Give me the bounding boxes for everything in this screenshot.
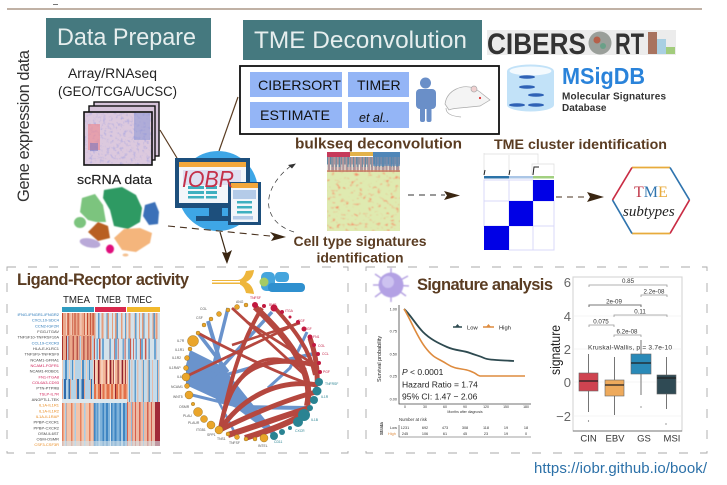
label: Gene expression data: Gene expression data bbox=[15, 49, 33, 202]
risk table: 473 bbox=[442, 426, 448, 430]
node labels: IGF bbox=[306, 327, 312, 331]
heatmap row labels: ANGPTL1-TEK bbox=[32, 397, 59, 402]
chart: signature boxplot: 0 bbox=[564, 375, 571, 390]
logo: MSigDB: Molecular Signatures bbox=[562, 92, 666, 102]
heading: Data Prepare bbox=[46, 18, 211, 58]
column headers: TMEC bbox=[126, 295, 152, 306]
connector: methods to IOBR bbox=[219, 97, 238, 151]
heading: Data Prepare: Data Prepare bbox=[57, 24, 196, 51]
node labels: PGF bbox=[323, 370, 330, 374]
chart: signature boxplot: 0.11 bbox=[634, 308, 646, 316]
risk table: 23 bbox=[484, 432, 488, 436]
chart: signature boxplot: 6 bbox=[564, 275, 571, 290]
heatmap row labels: NCAM1-FGFR1 bbox=[31, 363, 60, 368]
red ribbons bbox=[185, 307, 318, 438]
panel: deconvolution methods: CIBERSORT bbox=[258, 77, 341, 93]
chart: signature boxplot: CIN bbox=[580, 434, 597, 444]
node labels: BMP bbox=[269, 303, 277, 307]
column headers: TMEB bbox=[96, 295, 121, 306]
heatmap row labels: TNFSF10-TNFRSF10A bbox=[17, 335, 59, 340]
chart: TME cluster matrix bbox=[484, 153, 554, 250]
heatmap row labels bbox=[17, 312, 60, 447]
teal nodes bbox=[270, 378, 323, 440]
risk table: High bbox=[388, 432, 396, 436]
chart: signature boxplot: 0.075 bbox=[593, 318, 609, 326]
heatmap row labels: PPBP-CXCR2 bbox=[33, 425, 60, 430]
logo: MSigDB: MSigDB bbox=[562, 63, 645, 89]
heading: bulkseq deconvolution: bulkseq deconvolution bbox=[295, 136, 462, 152]
boxes bbox=[579, 354, 676, 396]
chart: signature boxplot: 2.2e-08 bbox=[644, 288, 665, 296]
link: book URL: https://iobr.github.io/book/ bbox=[534, 460, 708, 477]
icon: human bbox=[416, 78, 436, 122]
chart: signature boxplot: 2e-09 bbox=[606, 298, 622, 306]
logo: MSigDB bbox=[507, 63, 666, 114]
chart: Kaplan-Meier survival: 0 bbox=[404, 405, 406, 409]
chart: signature boxplot bbox=[547, 275, 682, 444]
risk table: 45 bbox=[463, 432, 467, 436]
statistics: Hazard Ratio = 1.74 bbox=[402, 380, 478, 390]
chart: Kaplan-Meier survival: 150 bbox=[503, 405, 509, 409]
risk table: 1231 bbox=[401, 426, 409, 430]
chart: signature boxplot: 4 bbox=[564, 309, 571, 324]
statistics: 95% CI: 1.47 − 2.06 bbox=[402, 392, 478, 402]
node labels: OSMR bbox=[179, 405, 190, 409]
legend: High bbox=[499, 326, 511, 332]
label: Cell type signatures identification: Cell type signatures bbox=[293, 233, 427, 249]
risk table: 61 bbox=[443, 432, 447, 436]
chart: signature boxplot: Kruskal-Wallis, p = 3.7e-10 bbox=[588, 344, 672, 352]
node labels: INTEL bbox=[258, 444, 268, 448]
chart: Kaplan-Meier survival: 180 bbox=[523, 405, 529, 409]
heading: TME cluster identification: TME cluster identification bbox=[494, 136, 667, 152]
node labels: IL1R1 bbox=[175, 348, 184, 352]
chart: signature boxplot: 0.85 bbox=[622, 278, 635, 285]
node labels: CD11 bbox=[274, 440, 283, 444]
panel: deconvolution methods: TIMER bbox=[357, 77, 401, 93]
chart: Kaplan-Meier survival: 0.25 bbox=[390, 374, 397, 378]
panel: deconvolution methods: ESTIMATE bbox=[260, 107, 330, 123]
label: Cell type signatures identification bbox=[293, 233, 427, 266]
icon: TME subtypes hexagon: TME bbox=[634, 184, 668, 201]
column headers bbox=[63, 295, 152, 306]
blue ribbons bbox=[186, 308, 317, 437]
chart: Kaplan-Meier survival: Months after diagnosis bbox=[447, 410, 483, 414]
heatmap row labels: CXCL10-SDC4 bbox=[32, 318, 60, 323]
heatmap row labels: FN1-ITGA8 bbox=[39, 374, 60, 379]
heatmap row labels: TNFSF9-TNFRSF9 bbox=[25, 352, 60, 357]
node labels: TNFSF bbox=[229, 441, 240, 445]
risk table: 245 bbox=[402, 432, 408, 436]
node labels: IL1RAP bbox=[169, 366, 181, 370]
chart: bulk heatmap bbox=[327, 152, 400, 231]
heatmap row labels: NCAM1-ROBO1 bbox=[30, 369, 60, 374]
chart: Kaplan-Meier survival: 0.75 bbox=[390, 330, 397, 334]
chart: Kaplan-Meier survival: 0.50 bbox=[390, 352, 397, 356]
column headers: TMEA bbox=[63, 295, 90, 306]
risk table: 19 bbox=[504, 432, 508, 436]
chart: signature boxplot: GS bbox=[637, 434, 651, 444]
node labels: IL1B bbox=[311, 418, 319, 422]
chart: signature boxplot: MSI bbox=[664, 434, 680, 444]
icon: IOBR computer: IOBR bbox=[182, 166, 234, 192]
legend: Low bbox=[467, 326, 478, 332]
label: Array/RNAseq sources: Array/RNAseq bbox=[68, 66, 157, 81]
label: Array/RNAseq sources: (GEO/TCGA/UCSC) bbox=[58, 84, 177, 99]
node labels: PLAU bbox=[183, 414, 192, 418]
chart: Kaplan-Meier survival: 0.00 bbox=[390, 398, 397, 402]
node labels: FN1 bbox=[313, 335, 320, 339]
node labels: WNT5 bbox=[173, 395, 183, 399]
heatmap row labels: IFNG-IFNGR1-IFNGR2 bbox=[17, 312, 60, 317]
legend bbox=[453, 324, 511, 332]
icon: mouse bbox=[445, 86, 490, 117]
logo: CIBERSORT: CIBERS bbox=[487, 28, 586, 61]
logo: CIBERSORT: RT bbox=[615, 28, 644, 61]
risk table: Strata bbox=[379, 422, 384, 435]
heatmap row labels: PPBP-CXCR1 bbox=[33, 420, 60, 425]
statistics: P < 0.0001 bbox=[402, 367, 444, 377]
heatmap row labels: OSM-IL6ST bbox=[38, 431, 60, 436]
icon: IOBR computer bbox=[175, 151, 261, 231]
node labels: TNFSF bbox=[250, 296, 261, 300]
red nodes bbox=[252, 302, 322, 374]
risk table: Number at risk bbox=[399, 417, 428, 422]
heading: Signature analysis bbox=[417, 276, 553, 294]
statistics bbox=[402, 367, 478, 402]
panel: Signature analysis bbox=[366, 267, 707, 453]
arrow: to bulk deconvolution bbox=[269, 164, 296, 232]
node labels: TNFRSF bbox=[325, 382, 338, 386]
chart: signature boxplot: −2 bbox=[556, 409, 571, 424]
risk table: 308 bbox=[462, 426, 468, 430]
significance brackets bbox=[589, 285, 667, 337]
risk table: 18 bbox=[524, 426, 528, 430]
chart: Kaplan-Meier survival: 60 bbox=[443, 405, 447, 409]
chart: signature boxplot: signature bbox=[547, 325, 563, 375]
heatmap row labels: COL6A3-CD93 bbox=[32, 380, 60, 385]
heatmap row labels: NCAM1-GFRA1 bbox=[30, 357, 60, 362]
heatmap row labels: IL1A-IL1R2 bbox=[39, 408, 60, 413]
chart: signature boxplot: 2 bbox=[564, 342, 571, 357]
icon: TME subtypes hexagon bbox=[612, 168, 690, 234]
heatmap row labels: CCN2-IGF2R bbox=[35, 323, 59, 328]
chart: Kaplan-Meier survival: 90 bbox=[463, 405, 467, 409]
node labels: CXCR bbox=[295, 429, 305, 433]
node labels bbox=[169, 296, 338, 448]
node labels: PLAUR bbox=[188, 421, 200, 425]
icon: virus cell bbox=[373, 268, 409, 302]
chart: Kaplan-Meier survival bbox=[377, 305, 531, 437]
heatmap row labels: TSLP-IL7R bbox=[39, 391, 59, 396]
node labels: IL1R2 bbox=[172, 356, 181, 360]
node labels: ITGB1 bbox=[196, 428, 206, 432]
arrow: bulk to cluster bbox=[408, 191, 460, 200]
heatmap row labels: OSM-OSMR bbox=[37, 437, 59, 442]
risk table: 0 bbox=[525, 432, 527, 436]
label: scRNA data: scRNA data bbox=[77, 172, 153, 187]
label: Cell type signatures identification: identification bbox=[316, 250, 404, 266]
heatmap row labels: FGG-ITGAV bbox=[37, 329, 59, 334]
chart: signature boxplot: 6.2e-08 bbox=[616, 328, 638, 336]
panel: deconvolution methods: et al.. bbox=[359, 111, 390, 125]
chart: single-cell clusters bbox=[74, 187, 159, 256]
risk table: 692 bbox=[422, 426, 428, 430]
node labels: COL bbox=[200, 307, 207, 311]
node labels: FGF bbox=[298, 319, 305, 323]
node labels: CCL bbox=[322, 352, 329, 356]
heading: TME Deconvolution bbox=[243, 20, 482, 60]
heatmap row labels: CSF3-CSF3R bbox=[34, 442, 59, 447]
node labels: IL7R bbox=[177, 339, 185, 343]
icon: TME subtypes hexagon: subtypes bbox=[623, 204, 675, 220]
label: Array/RNAseq sources bbox=[58, 66, 177, 99]
node labels: SPP1 bbox=[207, 433, 216, 437]
logo: MSigDB: Database bbox=[562, 103, 607, 114]
orange nodes bbox=[182, 303, 268, 442]
chart: Kaplan-Meier survival: Survival probability bbox=[377, 336, 383, 382]
chart: Kaplan-Meier survival: 1.00 bbox=[390, 308, 397, 312]
node labels: CSF bbox=[196, 316, 203, 320]
risk table: 106 bbox=[422, 432, 428, 436]
panel: deconvolution methods bbox=[240, 66, 499, 134]
panel: Ligand-Receptor activity bbox=[7, 267, 348, 453]
arrow: cluster to subtypes bbox=[556, 192, 604, 202]
heading: TME Deconvolution: TME Deconvolution bbox=[254, 27, 467, 54]
node labels: TNS1 bbox=[217, 437, 226, 441]
logo: CIBERSORT bbox=[487, 28, 676, 61]
node labels: IL1R bbox=[321, 395, 329, 399]
chart: Kaplan-Meier survival: 30 bbox=[423, 405, 427, 409]
chart: interaction network bbox=[169, 296, 338, 448]
chart: signature boxplot: EBV bbox=[605, 434, 625, 444]
arrow: to cell type signatures bbox=[168, 226, 286, 241]
risk table bbox=[379, 417, 531, 437]
heading: Ligand-Recptor activity bbox=[17, 271, 190, 289]
arrow: IOBR to analysis bbox=[220, 232, 232, 264]
risk table: Low bbox=[390, 426, 397, 430]
chart: ligand-receptor heatmap bbox=[62, 313, 160, 446]
heatmap row labels: HLA-E-KLRC1 bbox=[33, 346, 60, 351]
heatmap row labels: IL1A-IL1RAP bbox=[36, 414, 59, 419]
risk table: 118 bbox=[483, 426, 489, 430]
node labels: ITGA bbox=[285, 309, 294, 313]
risk table: 19 bbox=[504, 426, 508, 430]
icon: stacked expression heatmaps bbox=[84, 102, 159, 165]
node labels: IL6 bbox=[177, 375, 182, 379]
chart: Kaplan-Meier survival: 120 bbox=[483, 405, 489, 409]
node labels: ANG bbox=[236, 300, 244, 304]
node labels: NCAM1 bbox=[171, 385, 183, 389]
column annotation bar bbox=[62, 307, 160, 312]
heatmap row labels: PTN-PTPRB bbox=[36, 386, 59, 391]
heatmap row labels: IL1A-IL1R1 bbox=[39, 403, 60, 408]
connector: heatmap to IOBR bbox=[160, 130, 177, 158]
heatmap row labels: CCL19-CXCR3 bbox=[32, 340, 60, 345]
node labels: COL bbox=[318, 344, 325, 348]
icon: ligand receptor bbox=[212, 270, 305, 294]
